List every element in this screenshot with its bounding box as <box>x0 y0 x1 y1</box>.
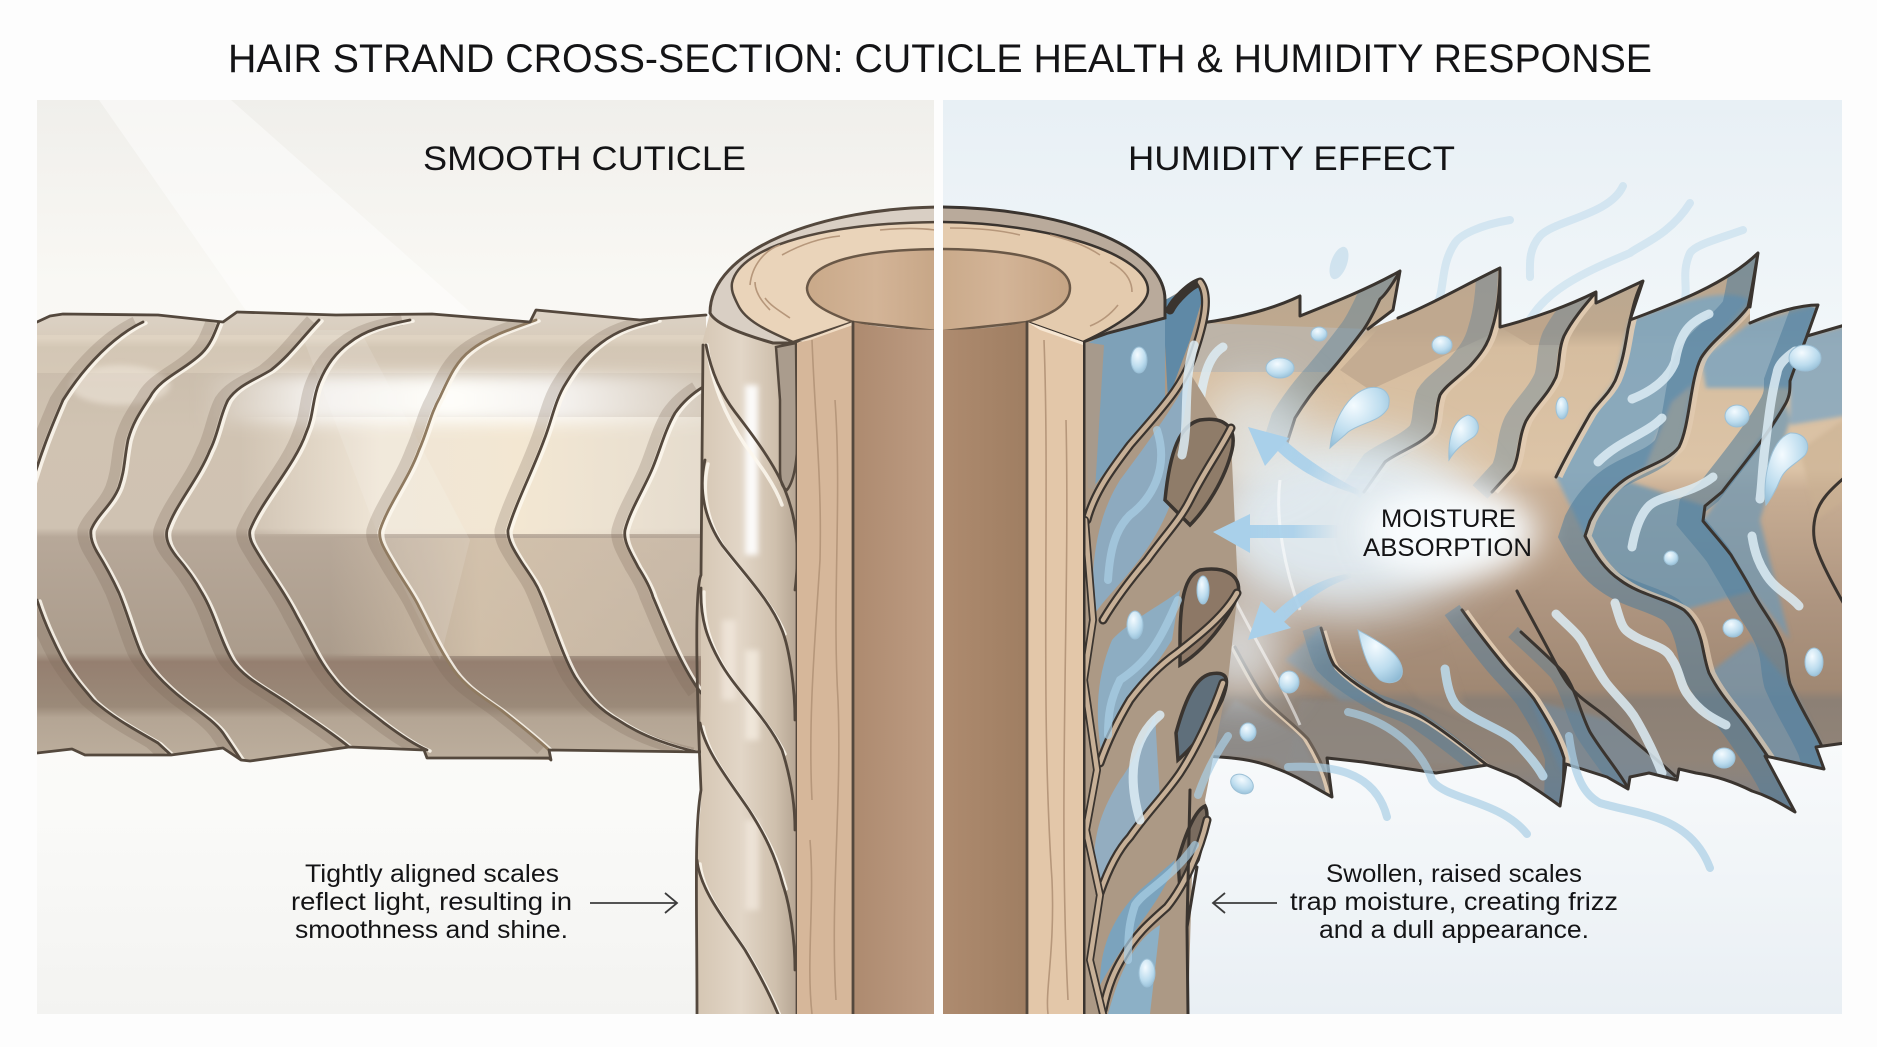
label: moisture absorption: MOISTURE <box>1381 505 1516 533</box>
smooth hair strand <box>22 300 712 770</box>
title: HAIR STRAND CROSS-SECTION: CUTICLE HEALTH & HUMIDITY RESPONSE <box>228 37 1652 81</box>
caption: smooth cuticle: smoothness and shine. <box>295 916 568 944</box>
moisture glow <box>1195 380 1537 700</box>
outer cuticle ring <box>935 207 1165 342</box>
cuticle wall with twisted scales <box>696 313 797 1018</box>
heading: smooth cuticle: SMOOTH CUTICLE <box>423 140 746 178</box>
grey panel and blue inner surfaces <box>1088 320 1165 484</box>
arrow: humidity caption to cuticle <box>1213 893 1277 913</box>
in-strand highlights <box>1198 342 1228 398</box>
hollow medulla opening <box>807 249 945 332</box>
panel: smooth cuticle <box>22 100 934 1018</box>
swollen hair strand with raised scales <box>1190 251 1842 814</box>
faint scale outlines inside glow <box>1235 480 1300 725</box>
cuticle wall with raised scales <box>1084 280 1239 1014</box>
humidity wisps below strand <box>1198 712 1710 868</box>
caption: humidity effect: trap moisture, creating frizz <box>1290 888 1618 916</box>
hair cross-section: right half <box>935 207 1165 1014</box>
caption: humidity effect: Swollen, raised scales <box>1326 860 1582 888</box>
cortex top face <box>935 222 1148 342</box>
raised scale bulbs <box>1165 419 1239 890</box>
medulla column left <box>854 322 934 1014</box>
water droplets <box>1127 327 1823 987</box>
heading: humidity effect: HUMIDITY EFFECT <box>1128 140 1455 178</box>
humidity wisps above strand <box>1330 182 1747 318</box>
cut cortex right <box>1027 322 1083 1014</box>
medulla column right <box>935 322 1027 1014</box>
caption: smooth cuticle <box>291 860 572 944</box>
caption: smooth cuticle: reflect light, resulting in <box>291 888 572 916</box>
caption: humidity effect <box>1290 860 1618 944</box>
caption: humidity effect: and a dull appearance. <box>1319 916 1589 944</box>
cortex growth rings <box>750 228 935 318</box>
label: moisture absorption: ABSORPTION <box>1363 534 1532 562</box>
hollow medulla opening <box>935 249 1070 332</box>
cortex growth rings <box>950 228 1132 326</box>
moisture arrows <box>1213 427 1359 640</box>
arrow: smooth caption to cuticle <box>590 893 677 913</box>
blue saturated bands <box>1190 295 1850 812</box>
hair cross-section: left half <box>710 207 945 1014</box>
panel: humidity effect <box>943 100 1850 1014</box>
specular highlights <box>722 385 759 910</box>
outer cuticle ring <box>710 207 945 343</box>
cut cortex left <box>797 322 853 1014</box>
cortex top face <box>732 222 945 342</box>
caption: smooth cuticle: Tightly aligned scales <box>305 860 559 888</box>
scale rims <box>1084 282 1237 1014</box>
label: moisture absorption <box>1363 505 1532 562</box>
